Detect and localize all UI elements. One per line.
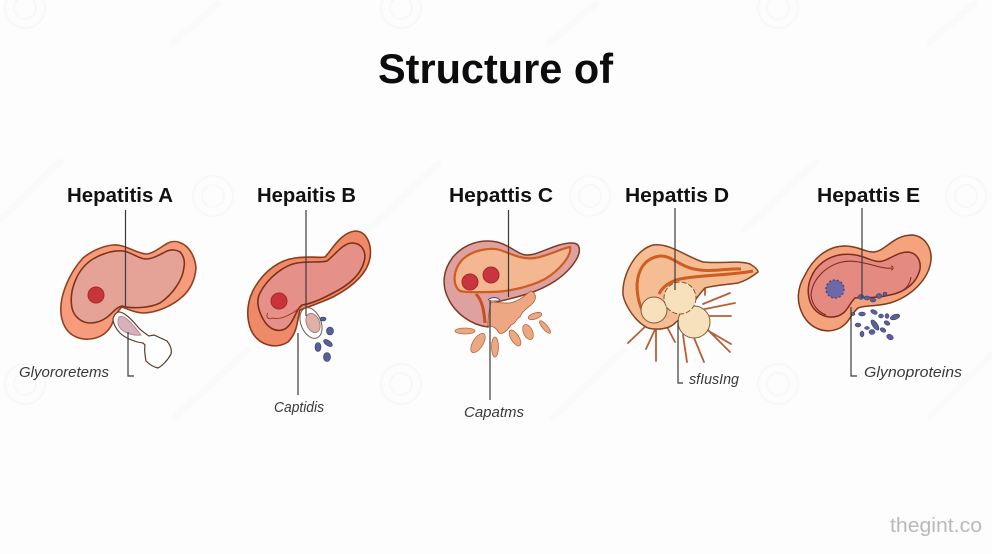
label: Glyororetems: Glyororetems [19,364,109,381]
panel: Hepatitis E [798,185,963,381]
icon: liver C [444,241,579,357]
panel: Hepatitis D [623,185,758,388]
panel: Hepatitis C [444,185,579,421]
heading: Hepatitis D: Hepattis D [625,185,729,207]
leader line A [126,210,134,376]
panel: Hepatitis A [19,185,196,381]
heading: Hepatitis C: Hepattis C [449,185,553,207]
icon: liver D [623,245,758,362]
leader line D [675,208,683,383]
heading: Hepatitis E: Hepattis E [817,185,920,207]
panel: Hepatitis B [248,185,370,416]
leader line C [490,210,508,400]
leader line E [851,208,862,376]
leader line B [298,210,306,395]
label: Captidis: Captidis [274,399,324,416]
heading: Hepatitis A: Hepatitis A [67,185,173,207]
watermark logo: thegint.co [890,515,982,537]
heading: Hepatitis B: Hepaitis B [257,185,356,207]
icon: liver B [248,231,370,362]
title: Structure of [378,45,614,92]
label: sfIusIng: sfIusIng [689,371,740,388]
icon: liver A [61,242,196,368]
icon: liver E [798,235,931,341]
label: Capatms: Capatms [464,404,524,421]
label: Glynoproteins: Glynoproteins [864,364,963,381]
